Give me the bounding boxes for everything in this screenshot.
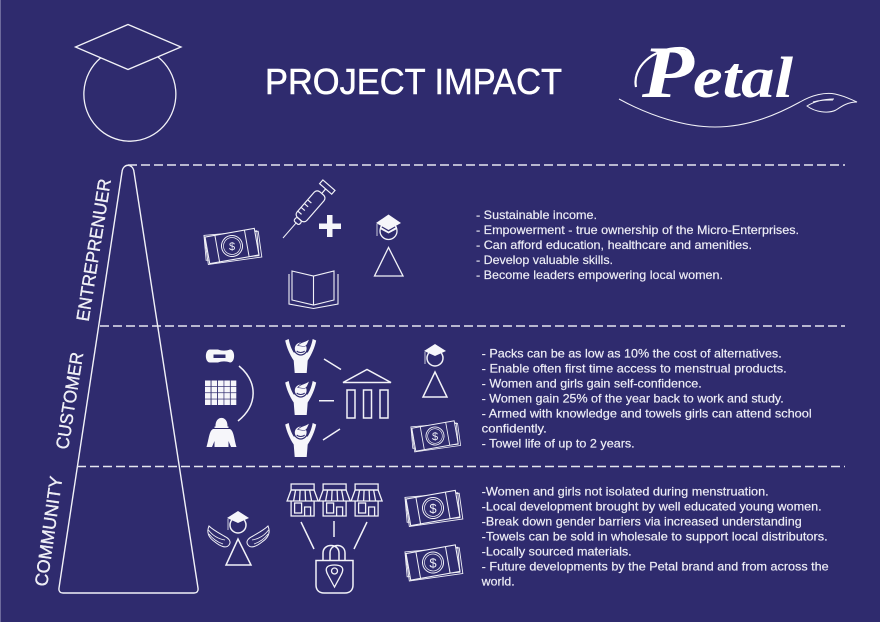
logo: Petal: etal (693, 45, 794, 110)
title: PROJECT IMPACT (265, 61, 562, 102)
text: entrepreneur impacts: - Sustainable income. (476, 208, 597, 222)
icon: graduate, customer (423, 344, 447, 397)
text: community impacts: -Towels can be sold in wholesale to support local distributors. (482, 529, 828, 543)
connector lines: women to school (319, 359, 341, 440)
icon: plus (319, 215, 341, 237)
icon: women group (285, 338, 316, 457)
text: community impacts: -Break down gender barriers via increased understanding (482, 514, 802, 528)
text: customer impacts: - Women gain 25% of the year back to work and study. (482, 391, 784, 405)
connector lines: shops to bag (301, 521, 367, 549)
text: entrepreneur impacts: - Can afford education, healthcare and amenities. (476, 238, 752, 252)
icon: book (289, 271, 338, 308)
divider: customer to community (77, 466, 845, 468)
text: entrepreneur impacts (476, 208, 799, 282)
icon: money, customer: $ (432, 431, 438, 443)
divider: entrepreneur to customer (100, 325, 845, 327)
text: customer impacts: - Armed with knowledge and towels girls can attend school (482, 406, 812, 420)
icon: money, community bottom (403, 543, 464, 583)
logo: Petal (619, 32, 857, 127)
text: community impacts: world. (481, 574, 515, 588)
icon: graduate, entrepreneur (374, 214, 403, 276)
icon: towel pad (206, 350, 234, 362)
icon: syringe (277, 180, 335, 243)
text: community impacts (481, 484, 829, 588)
text: community impacts: - Future developments by the Petal brand and from across the (482, 559, 829, 573)
icon: money, entrepreneur (202, 226, 263, 267)
icon: money, entrepreneur: $ (229, 241, 235, 253)
text: community impacts: -Locally sourced materials. (482, 544, 632, 558)
icon: money, community bottom: $ (429, 556, 437, 570)
label: community: COMMUNITY (31, 475, 66, 588)
text: customer impacts (482, 346, 812, 450)
divider: entrepreneur top (128, 164, 845, 166)
icon: local shopping bag (316, 546, 353, 593)
icon: money, customer (409, 419, 461, 454)
icon: school building (343, 370, 391, 418)
text: community impacts: -Local development brought by well educated young women. (482, 499, 822, 513)
text: entrepreneur impacts: - Develop valuable skills. (476, 253, 613, 267)
icon: graduate head (76, 24, 181, 141)
text: community impacts: -Women and girls not isolated during menstruation. (482, 484, 769, 498)
text: customer impacts: - Enable often first time access to menstrual products. (482, 361, 787, 375)
text: customer impacts: - Towel life of up to 2 years. (482, 436, 635, 450)
icon: angel graduate (208, 511, 269, 565)
icon: customer figure (206, 418, 236, 447)
icon: market shops (287, 484, 382, 516)
label: customer: CUSTOMER (52, 351, 87, 451)
logo: Petal: P (641, 32, 695, 114)
text: entrepreneur impacts: - Empowerment - true ownership of the Micro-Enterprises. (476, 223, 799, 237)
text: customer impacts: confidently. (482, 421, 547, 435)
text: customer impacts: - Packs can be as low as 10% the cost of alternatives. (482, 346, 782, 360)
icon: towel grid (205, 380, 236, 405)
icon: money, community top (403, 488, 464, 529)
label: entrepreneur: ENTREPRENUER (73, 177, 115, 323)
text: entrepreneur impacts: - Become leaders empowering local women. (476, 268, 723, 282)
icon: money, community top: $ (429, 501, 437, 516)
pyramid (59, 165, 198, 593)
text: customer impacts: - Women and girls gain self-confidence. (482, 376, 702, 390)
arc: product to customer (238, 366, 253, 421)
